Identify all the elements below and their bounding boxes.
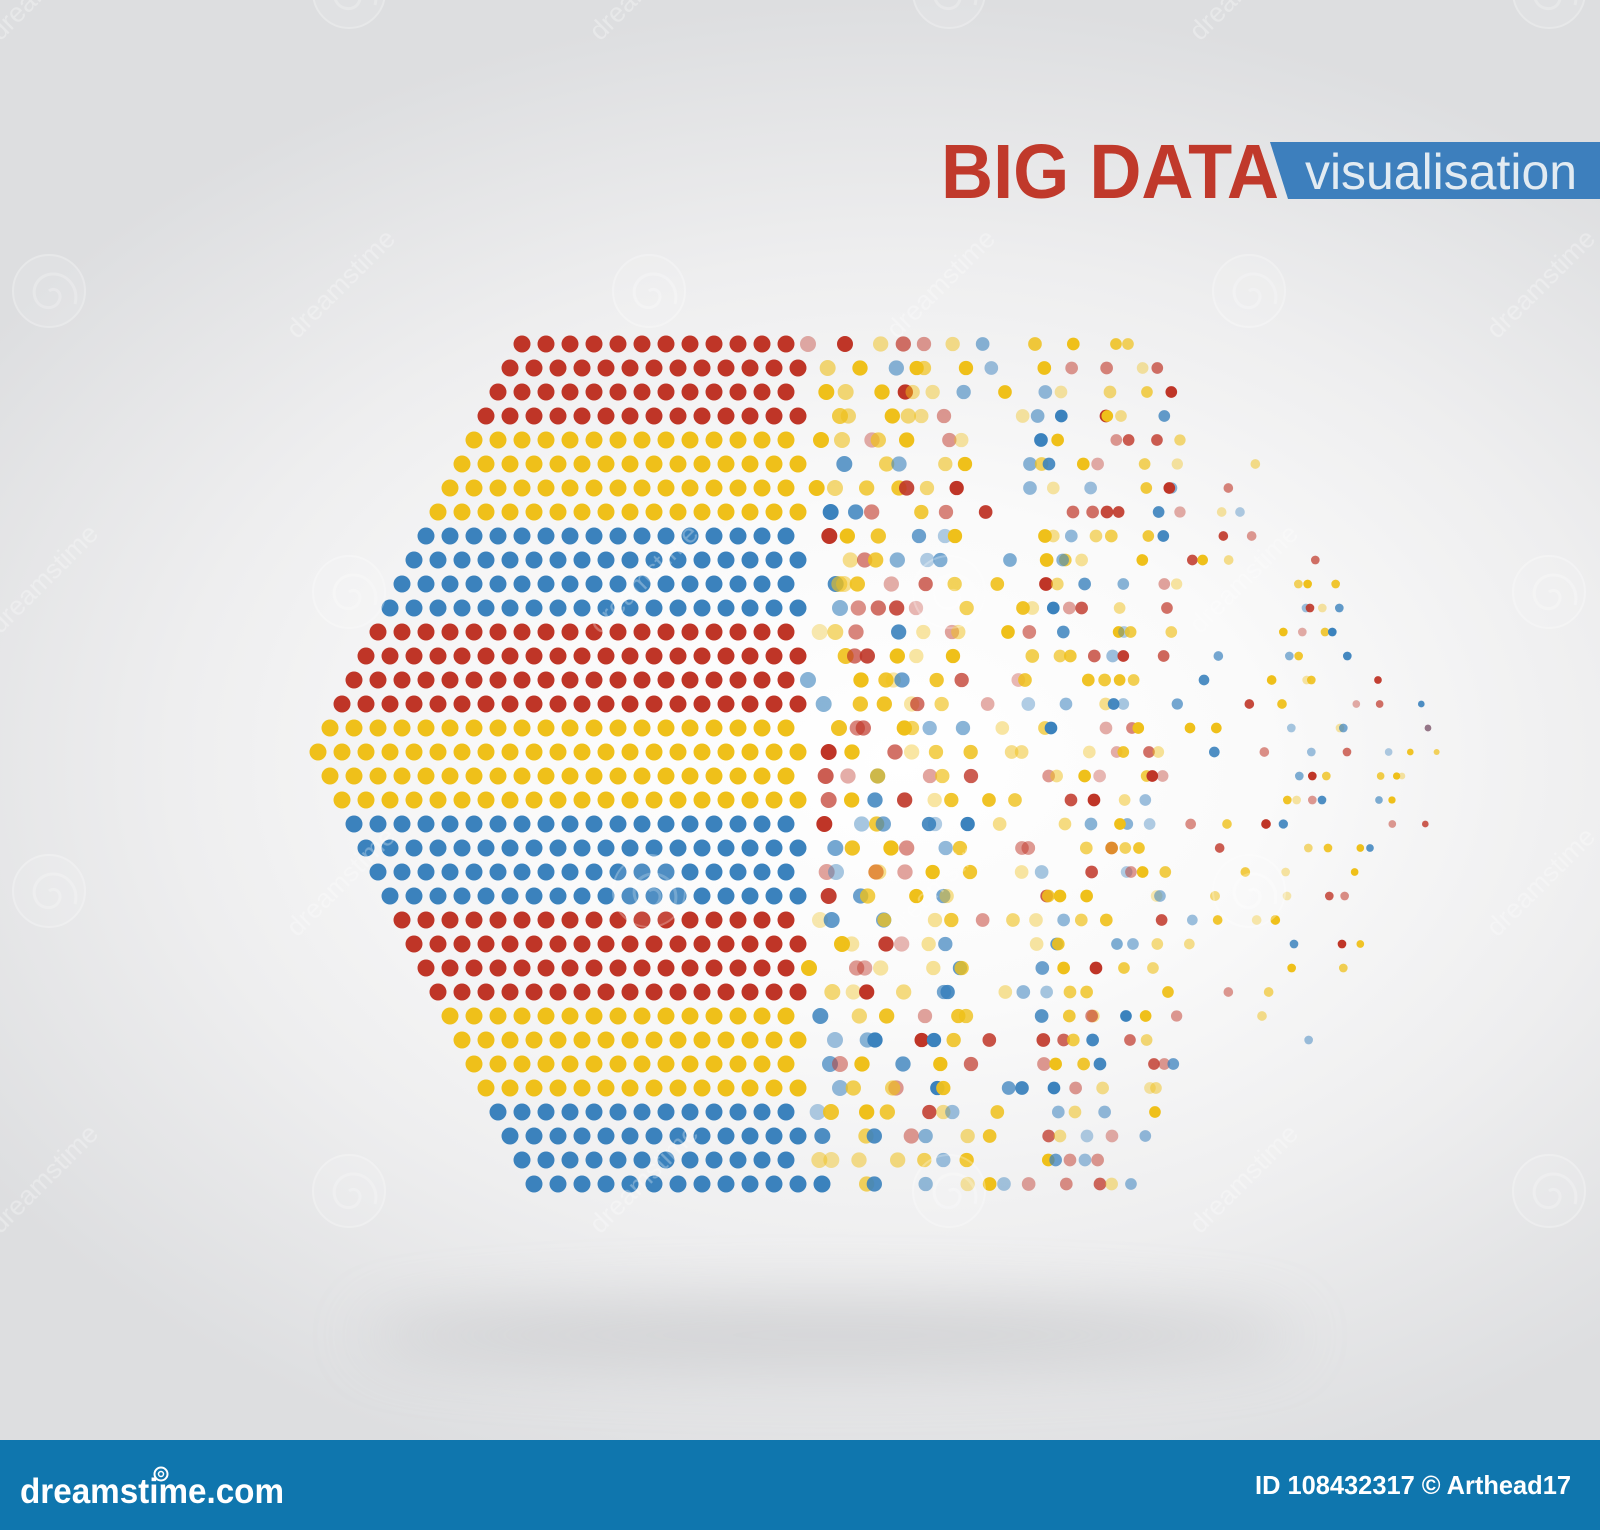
watermark: dreamstime text: dreamstime <box>583 1118 704 1239</box>
footer logo: dreamstime.com: dreamstime.com <box>20 1472 284 1511</box>
watermark: dreamstime text: dreamstime <box>880 223 1001 344</box>
footer bar <box>0 1440 1600 1530</box>
watermark: dreamstime text: dreamstime <box>583 518 704 639</box>
scattered dots: sparse right tip <box>1184 459 1440 1044</box>
watermark: dreamstime text: dreamstime <box>1480 223 1600 344</box>
floor shadow <box>360 1301 1300 1369</box>
watermark: dreamstime text: dreamstime <box>280 821 401 942</box>
watermark: dreamstime text: dreamstime <box>1183 518 1304 639</box>
solid hexagon half of dots <box>318 344 823 1184</box>
watermark: dreamstime text: dreamstime <box>880 821 1001 942</box>
scattered dots: dissolving middle section <box>800 336 1186 1192</box>
footer credit: image ID and author: ID 108432317 © Arthead17 <box>1255 1470 1571 1500</box>
subtitle banner: visualisation: visualisation <box>1305 144 1577 200</box>
watermark: dreamstime text: dreamstime <box>1480 821 1600 942</box>
watermark: spirals <box>13 0 1585 1227</box>
watermark: dreamstime text: dreamstime <box>280 223 401 344</box>
title: BIG DATA: BIG DATA <box>941 129 1279 215</box>
watermark: dreamstime text: dreamstime <box>1183 1118 1304 1239</box>
